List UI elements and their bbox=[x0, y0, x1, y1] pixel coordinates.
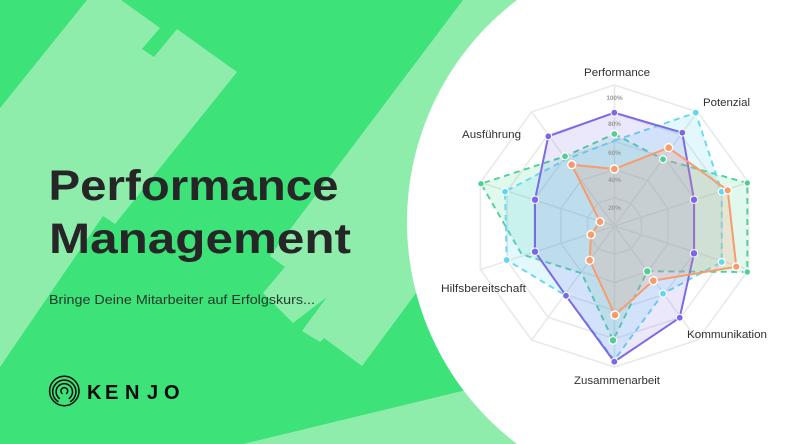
series: orange solid bbox=[572, 148, 736, 315]
wordmark: KENJO bbox=[87, 382, 180, 404]
axis percent labels: 80% bbox=[608, 121, 621, 128]
markers: cyan bbox=[502, 109, 725, 297]
axis category labels: Potenzial bbox=[703, 97, 750, 109]
axis category labels: Ausführung bbox=[462, 129, 521, 141]
icon: Kenjo maze mark bbox=[50, 376, 79, 406]
series: purple solid bbox=[535, 113, 694, 362]
axis percent labels bbox=[606, 95, 623, 212]
series: cyan dashed bbox=[505, 113, 722, 360]
title: Management bbox=[49, 215, 351, 263]
axis percent labels: 20% bbox=[608, 205, 621, 212]
title bbox=[48, 162, 351, 263]
background shape: upper left light band bbox=[0, 0, 237, 367]
markers: orange bbox=[568, 144, 740, 319]
axis category labels: Zusammenarbeit bbox=[574, 375, 660, 387]
axis percent labels: 60% bbox=[608, 150, 621, 157]
background shape: bottom light wedge bbox=[243, 377, 560, 444]
axis category labels: Kommunikation bbox=[687, 329, 767, 341]
axis category labels: Hilfsbereitschaft bbox=[441, 283, 526, 295]
axis percent labels: 40% bbox=[608, 177, 621, 184]
subtitle: Bringe Deine Mitarbeiter auf Erfolgskurs... bbox=[49, 292, 315, 307]
series: green dashed bbox=[481, 134, 747, 340]
chart grid bbox=[480, 85, 749, 367]
background shape: centre light band bbox=[263, 0, 633, 366]
panel: white circle bbox=[407, 0, 790, 444]
axis category labels: Performance bbox=[584, 67, 650, 79]
axis category labels bbox=[441, 67, 767, 387]
markers: green bbox=[478, 130, 751, 344]
markers: purple bbox=[531, 109, 698, 365]
radar chart bbox=[441, 67, 767, 387]
axis percent labels: 100% bbox=[606, 95, 623, 102]
logo: Kenjo bbox=[50, 376, 180, 406]
title: Performance bbox=[48, 162, 338, 210]
